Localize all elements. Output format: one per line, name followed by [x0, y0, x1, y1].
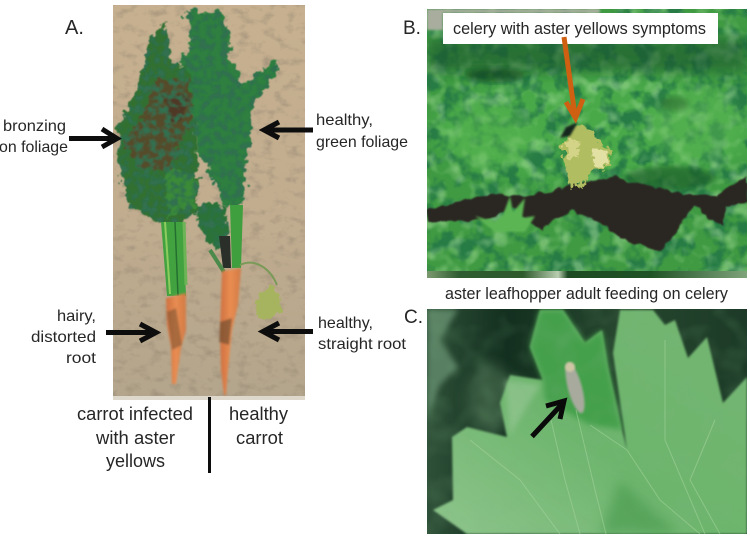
- leaf veins: [470, 340, 720, 534]
- photo: celery rows: [427, 9, 750, 278]
- arrow: orange pointer: [564, 37, 583, 118]
- label: bronzing on foliage: bronzing: [3, 118, 66, 135]
- photo: celery leaf: [427, 309, 747, 534]
- label: hairy distorted root: hairy,: [57, 308, 96, 325]
- label: healthy green foliage: healthy,: [316, 112, 373, 129]
- label: healthy straight root: straight root: [318, 336, 407, 353]
- panel B: celery field: [403, 9, 750, 303]
- arrow: healthy root: [263, 323, 313, 340]
- leaf shape: [433, 310, 747, 534]
- label: healthy green foliage: green foliage: [316, 134, 408, 151]
- photo: carrots on sandy soil: [113, 5, 305, 400]
- arrow: leafhopper pointer: [532, 401, 564, 436]
- label: hairy distorted root: root: [66, 350, 97, 367]
- healthy carrot foliage: [180, 10, 278, 250]
- caption: leafhopper: aster leafhopper adult feeding on celery: [445, 285, 729, 303]
- label: bronzing on foliage: on foliage: [0, 139, 68, 156]
- caption: healthy carrot: carrot: [236, 428, 283, 448]
- healthy carrot root: [219, 268, 241, 395]
- label box: celery symptoms: [443, 13, 718, 44]
- caption: infected carrot: yellows: [106, 451, 165, 471]
- panel C: leafhopper photo: [404, 307, 747, 534]
- label: A.: A.: [65, 17, 84, 39]
- label: hairy distorted root: distorted: [31, 329, 96, 346]
- panel A: carrot comparison: [0, 5, 408, 473]
- icon: wilted sprig: [256, 283, 281, 319]
- arrow: healthy foliage: [264, 122, 313, 138]
- caption: healthy carrot: healthy: [229, 404, 288, 424]
- caption: infected carrot: with aster: [95, 428, 175, 448]
- carrot stems: [161, 205, 277, 296]
- arrow: distorted root: [106, 324, 156, 341]
- soil strip: [428, 176, 747, 250]
- label: C.: C.: [404, 307, 423, 328]
- icon: yellowed celery plant: [562, 125, 610, 186]
- infected carrot root: [166, 293, 186, 384]
- infected carrot foliage: [116, 24, 198, 226]
- label: B.: B.: [403, 18, 421, 39]
- icon: aster leafhopper: [564, 361, 586, 414]
- bottom strip of photo: [427, 271, 747, 278]
- arrow: bronzing: [69, 129, 117, 147]
- label: healthy straight root: healthy,: [318, 315, 373, 332]
- label box: celery symptoms: celery with aster yellows symptoms: [453, 20, 706, 38]
- caption: infected carrot: carrot infected: [77, 404, 193, 424]
- bottom plants: [475, 196, 535, 232]
- divider between captions: [208, 397, 211, 473]
